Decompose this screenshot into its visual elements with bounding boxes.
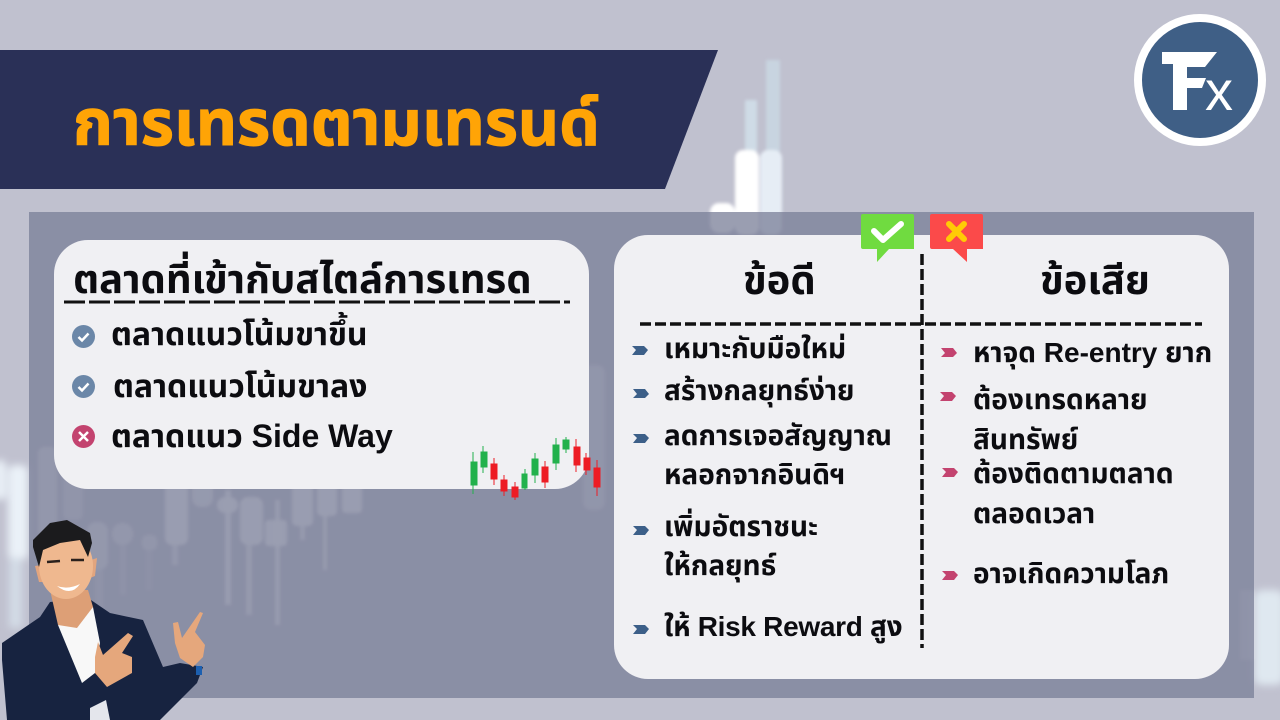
face [39, 533, 93, 599]
hand right [173, 612, 205, 667]
con 2 [973, 384, 1148, 455]
pro 5: ให้ Risk Reward สูง [664, 611, 902, 642]
con bullets [940, 348, 958, 580]
cuff [196, 666, 202, 675]
ears [35, 558, 97, 582]
candlestick chart [470, 437, 600, 500]
heading dashed rule [64, 300, 570, 304]
pro 2: สร้างกลยุทธ์ง่าย [664, 375, 854, 406]
panel: suitable markets [54, 240, 589, 489]
logo: FX [1134, 14, 1266, 146]
panel heading: ตลาดที่เข้ากับสไตล์การเทรด [73, 258, 532, 302]
logo: FX: x [1205, 59, 1233, 122]
pro 4 [664, 508, 818, 582]
pros list [632, 333, 902, 644]
smile [57, 584, 80, 591]
icon: green check badge [861, 214, 914, 262]
heading: cons: ข้อเสีย [1040, 259, 1150, 303]
pro bullets [632, 346, 649, 634]
pro 4: เพิ่มอัตราชนะ [664, 511, 818, 542]
jacket [2, 598, 203, 720]
hand left [95, 633, 133, 687]
con 2: สินทรัพย์ [973, 424, 1078, 455]
icon: cross [72, 425, 95, 448]
eyes and brows [47, 560, 84, 562]
pro 1: เหมาะกับมือใหม่ [664, 333, 846, 364]
market item 1: ตลาดแนวโน้มขาขึ้น [111, 316, 368, 352]
pro 3: ลดการเจอสัญญาณ [664, 420, 892, 451]
shirt [58, 607, 100, 683]
title banner [0, 50, 718, 189]
vertical dashed divider [920, 254, 924, 648]
heading: pros: ข้อดี [743, 259, 816, 303]
icon: check 1 [72, 325, 95, 348]
market item 2: ตลาดแนวโน้มขาลง [113, 368, 367, 404]
icon: check 2 [72, 375, 95, 398]
con 2: ต้องเทรดหลาย [973, 384, 1148, 415]
con 1: หาจุด Re-entry ยาก [973, 337, 1212, 368]
neck [50, 590, 93, 628]
pro 3 [664, 420, 892, 490]
pro 3: หลอกจากอินดิฯ [664, 458, 845, 490]
pro 4: ให้กลยุทธ์ [664, 550, 776, 581]
title: การเทรดตามเทรนด์ [73, 87, 600, 159]
content background panel [29, 212, 1254, 698]
con 3: ตลอดเวลา [973, 498, 1095, 529]
market item 3: ตลาดแนว Side Way [111, 418, 393, 454]
hair [33, 520, 92, 567]
panel: pros and cons [614, 235, 1229, 679]
con 3 [973, 458, 1174, 529]
cons list [940, 337, 1212, 589]
horizontal dashed divider [640, 322, 1202, 326]
shirt lower [90, 700, 110, 720]
con 3: ต้องติดตามตลาด [973, 458, 1174, 489]
presenter illustration [2, 520, 205, 720]
con 4: อาจเกิดความโลภ [973, 558, 1169, 589]
icon: red cross badge [930, 214, 983, 262]
